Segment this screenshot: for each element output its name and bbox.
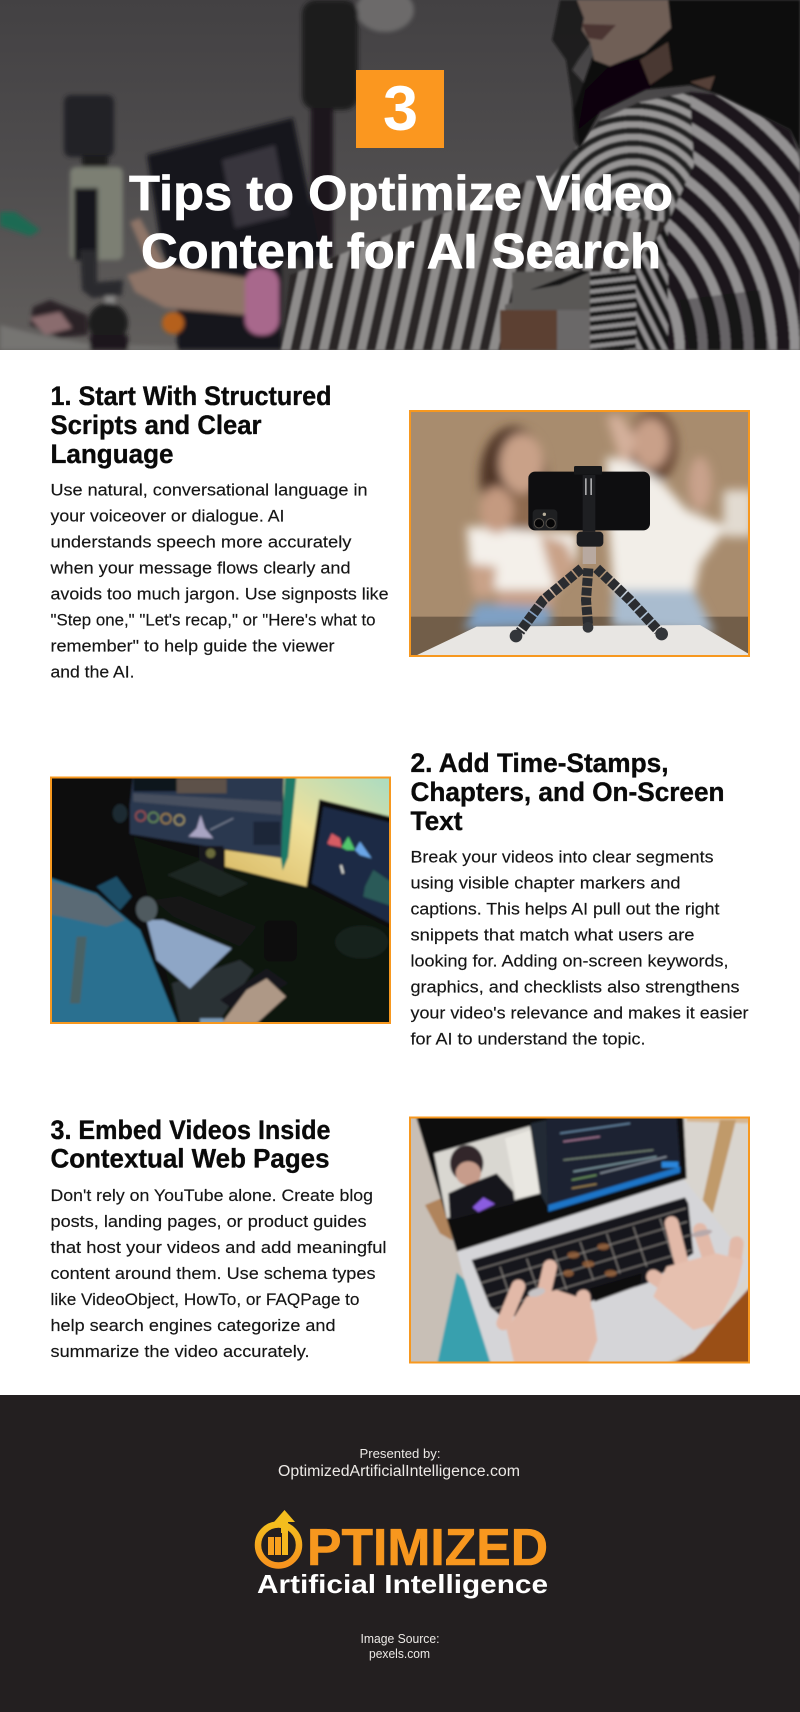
body text: tip 1: your voiceover or dialogue. AI [50,508,284,526]
header photo: creator filming with phone rig [0,0,800,350]
body text: tip 2: using visible chapter markers and [410,875,680,893]
body text: tip 1: when your message flows clearly and [49,560,351,578]
heading: tip 2: 2. Add Time-Stamps, [410,748,668,778]
title: Tips to Optimize Video [129,167,673,221]
tripod [520,568,658,632]
body text: tip 3 [50,1187,386,1361]
panel: tip 3 [50,1113,753,1370]
woman: hair, face and neck [552,0,800,150]
presented by text [278,1446,520,1480]
body text: tip 3: posts, landing pages, or product guides [50,1213,367,1231]
laptop screen: video call and code [434,1126,540,1218]
badge: number 3: 3 [383,74,418,144]
body text: tip 2: captions. This helps AI pull out the right [410,901,720,919]
photo frame: tip 1 [410,411,749,656]
photo: editor at dual monitors color grading [47,770,397,1030]
body text: tip 3: help search engines categorize and [50,1317,336,1335]
body text: tip 1: "Step one," "Let's recap," or "Here's what to [50,612,376,630]
logo: Optimized Artificial Intelligence: Artificial Intelligence [257,1569,548,1599]
body text: tip 1: Use natural, conversational language in [50,482,368,500]
heading: tip 2: Text [410,806,463,836]
body text: tip 1: understands speech more accurately [50,534,352,552]
image source text [360,1631,440,1661]
woman: blouse stripes [280,91,800,350]
heading: tip 2: Chapters, and On-Screen [410,777,724,807]
body text: tip 2: snippets that match what users are [410,927,694,945]
panel: tip 1 [49,381,753,682]
logo: Optimized Artificial Intelligence [257,1510,548,1599]
heading: tip 1 [50,381,332,469]
body text: tip 3: that host your videos and add meaningful [50,1239,386,1257]
image source text: pexels.com [369,1646,430,1661]
body text: tip 2: graphics, and checklists also strengthens [410,979,740,997]
presented by text: OptimizedArtificialIntelligence.com [278,1463,520,1480]
panel: header [0,0,800,350]
photo: hands typing on laptop during video call [407,1113,753,1370]
body text: tip 3: like VideoObject, HowTo, or FAQPage to [50,1291,360,1309]
image source text: Image Source: [360,1631,440,1646]
heading: tip 3 [50,1115,330,1174]
panel: tip 2 [47,748,749,1049]
photo: phone on tripod with two women waving [407,407,753,660]
body text: tip 2: looking for. Adding on-screen keywords, [410,953,728,971]
body text: tip 3: content around them. Use schema types [50,1265,376,1283]
body text: tip 2: your video's relevance and makes it easier [410,1005,749,1023]
phone [528,472,650,530]
body text: tip 2 [410,849,749,1049]
heading: tip 3: 3. Embed Videos Inside [50,1115,330,1145]
heading: tip 1: Language [50,439,174,469]
body text: tip 1: remember" to help guide the viewer [50,638,335,656]
keyboard [472,1197,693,1318]
body text: tip 1: and the AI. [50,664,134,682]
photo frame: tip 3 [410,1118,749,1362]
left desk scene [0,0,414,350]
heading: tip 1: 1. Start With Structured [50,381,332,411]
panel: footer [0,1395,800,1712]
body text: tip 2: for AI to understand the topic. [410,1031,646,1049]
hands [503,1223,737,1323]
title [129,167,673,279]
logo: Optimized Artificial Intelligence: PTIMIZED [307,1519,548,1577]
title: Content for AI Search [141,225,661,279]
badge: number 3 [356,70,444,148]
heading: tip 2 [410,748,724,836]
body text: tip 1 [49,482,389,682]
body text: tip 2: Break your videos into clear segments [410,849,714,867]
logo icon: ring with bars and up arrow [258,1510,299,1566]
body text: tip 3: Don't rely on YouTube alone. Create blog [50,1187,373,1205]
presented by text: Presented by: [360,1446,440,1461]
heading: tip 3: Contextual Web Pages [50,1144,330,1174]
heading: tip 1: Scripts and Clear [50,410,262,440]
body text: tip 1: avoids too much jargon. Use signposts like [50,586,388,604]
body text: tip 3: summarize the video accurately. [50,1343,310,1361]
photo frame: tip 2 [51,778,390,1023]
